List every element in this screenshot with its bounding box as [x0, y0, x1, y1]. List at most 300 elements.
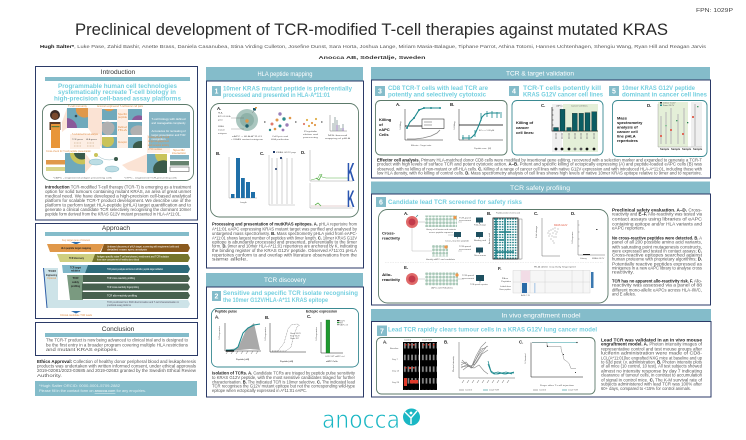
intro subheading: high-precision cell-based assay platforms — [54, 96, 182, 102]
panel: approach: Key target gene of interest — [62, 239, 90, 242]
contact bar: *Hugh Salter ORCID: 0000-0001-5709-2882 — [39, 384, 120, 388]
heading 5: 10mer KRAS G12V peptide — [622, 85, 696, 92]
chart: survival curve: % Survival — [524, 353, 527, 364]
figure box 1: A. — [217, 106, 221, 111]
middle tiles: Anocca's engineered T-cell/cancer cell pairs — [97, 105, 144, 108]
readout boxes: Specific — [173, 149, 186, 152]
step: TCR safety profiling: TCR — [72, 276, 78, 280]
figure box 2 — [212, 308, 358, 367]
chart: cell line pHLA repertoires: Sample — [660, 147, 670, 151]
lower right tile: and receptor activity — [148, 144, 170, 147]
intro subheading: systematically recreate T-cell biology in — [58, 89, 176, 96]
caption 3-5: observed, with no killing of non-mutant or off-HLA cells. C. Killing of a range of cancer cell lines with native G12V expression and with introduced HLA-A*11:01, including those with — [377, 166, 703, 171]
middle tiles: TCR genes — [72, 139, 84, 141]
caption 6: TCR has no apparent allo-reactivity risk. F. Allo- — [612, 278, 703, 283]
mouse imaging panels: Lead TCR — [422, 340, 432, 342]
chart: peptide lengths: Length — [240, 201, 247, 204]
contact bar: Please fill in the contact form on anocca.com for any enquiries. — [39, 389, 146, 393]
conclusion text: be the first entry in a broader program covering multiple HLA restrictions — [46, 342, 188, 348]
step: TCR engineering: preclinical assay platforms — [107, 303, 132, 307]
caption 6 — [612, 207, 703, 296]
badge 5: 5 — [612, 88, 616, 96]
affiliation: Anocca AB, Södertälje, Sweden — [318, 55, 426, 60]
row label: cell lines: — [516, 130, 534, 135]
middle tiles: HLA — [118, 129, 128, 132]
chart: peptide dose killing — [454, 109, 503, 150]
section: in vivo engraftment model: In vivo engraftment model — [502, 312, 580, 320]
poster ID: FPN: 1029P — [696, 8, 734, 14]
top tile — [67, 105, 88, 128]
row label — [617, 116, 643, 143]
section: TCR safety profiling — [371, 182, 710, 305]
section: HLA peptide mapping — [206, 67, 364, 268]
caption 6: reactivity and E–F. Allo-reactivity was tested via — [612, 212, 703, 216]
figure box 3 — [376, 100, 507, 155]
heading: introduction: Introduction — [101, 69, 136, 76]
step: TCR safety profiling — [67, 275, 190, 300]
ethics statement — [37, 359, 196, 378]
chart: 10mer selectivity: 9mer G12V — [290, 334, 300, 338]
heading 2: the 10mer G12V/HLA-A*11 KRAS epitope — [223, 297, 328, 304]
caption 1: Processing and presentation of mutKRAS epitopes. A. pHLA repertoire from — [212, 221, 358, 226]
step: peptide target mapping: Unbiased discovery of pHLA target, screening with engineered cells and — [107, 244, 179, 248]
chart: allo-reactivity heatmap: No — [502, 278, 510, 280]
row label: line pHLA — [617, 134, 636, 138]
badge 2: 2 — [215, 294, 219, 300]
heading 6: Candidate lead TCR screened for safety risks — [388, 199, 523, 206]
chart: photon intensity: Control — [465, 388, 473, 392]
caption 3-5: product with high levels of surface TCR and potent cytotoxic action. A–B. Potent and specific killing of ectopically expressing (A) and peptide-loaded eAPC cells (B) was — [377, 161, 702, 166]
figure box 6: F. — [498, 266, 501, 271]
allo-reactivity workflow — [406, 272, 488, 290]
section: TCR discovery — [206, 273, 364, 397]
figure box 2: Ectopic expression — [306, 310, 337, 314]
caption 7 — [601, 337, 703, 391]
intro text: Introduction TCR-modified T-cell therapy (TCR-T) is emerging as a treatment — [45, 184, 192, 190]
heading 5: dominant in cancer cell lines — [622, 92, 708, 98]
chart: 10mer selectivity: Peptide (nM) — [280, 360, 293, 363]
heading 3 — [388, 85, 489, 98]
section: TCR and target validation: TCR & target validation — [506, 70, 574, 78]
section: TCR safety profiling: TCR safety profiling — [510, 185, 570, 192]
intro text: peptide form derived from the KRAS G12V mutant presented in HLA-A*11:01. — [45, 211, 181, 216]
row label — [516, 120, 534, 135]
chart: minigene reactivity: Library — [580, 257, 588, 260]
icon: engineered cell: minigene — [218, 133, 228, 135]
chart: peptide pulse sensitivity — [219, 323, 261, 361]
chart: variant heatmap — [488, 212, 522, 259]
intro text: option for solid tumours containing mutant KRAS, an area of great unmet — [45, 189, 192, 194]
row label: spectrometry — [617, 120, 643, 125]
step: TCR safety profiling: safety — [72, 280, 79, 284]
caption 1 — [212, 221, 358, 262]
chart: allo-reactivity heatmap: Label-free — [500, 285, 512, 288]
heading 4 — [523, 85, 604, 98]
step: peptide target mapping: HLA peptide target mapping — [61, 246, 91, 250]
row label: of — [379, 122, 383, 127]
step: TCR engineering — [43, 268, 190, 308]
row label: Mass — [617, 116, 628, 120]
middle tiles: Defined — [118, 126, 128, 129]
caption 6: panel of all 200 possible amino acid variants, — [612, 240, 702, 244]
chart: ectopic expression: eAPC ctrl — [340, 324, 349, 326]
badge 7 — [377, 326, 387, 336]
caption 6: different mono-allelic eAPCs across HLA-I/II/C, — [612, 287, 702, 292]
chart: minigene reactivity: % Response — [572, 231, 574, 244]
heading 2: Sensitive and specific TCR isolate recognising — [223, 290, 358, 297]
section: TCR and target validation — [371, 67, 710, 178]
caption 6: eAPC reporters. — [612, 226, 645, 230]
icon: logo mark — [403, 408, 420, 426]
middle tiles — [72, 105, 144, 148]
chart: cross-reactive scatter: KRAS G12V — [554, 224, 568, 227]
chart: binding register 9mer — [310, 150, 355, 187]
caption 2 — [212, 370, 356, 393]
figure box 1: K — [347, 186, 355, 213]
step: peptide target mapping — [47, 244, 190, 252]
heading 1 — [223, 86, 353, 99]
chart: survival curve: Lead TCR — [568, 390, 578, 392]
allo-reactivity workflow: eAPCs with HLA alleles — [431, 286, 454, 290]
figure box 5: D. — [647, 103, 651, 108]
icon: peptides: processing — [303, 136, 319, 139]
chart: peptide dose killing: Peptide conc. (M) — [474, 147, 491, 150]
lower right tile: Cross-check T-cell — [148, 136, 169, 139]
caption 2: Isolation of TCRs. A. Candidate TCRs are triaged by peptide pulse sensitivity — [212, 370, 356, 375]
step: TCR engineering: TCR preclinical from SND discrimination and T-cell characterisation in — [107, 300, 179, 304]
middle tiles: Receptor — [118, 141, 127, 144]
ethics statement: Authority. — [37, 373, 62, 378]
step: TCR safety profiling: TCR cross-reactivity fingerprinting — [107, 285, 139, 289]
middle tiles: HLA genes — [86, 138, 98, 141]
logo: anocca: anocca — [322, 405, 400, 434]
chart: cross-reactive scatter: Fold change — [536, 225, 538, 238]
chart: cell line pHLA repertoires: Sample — [682, 147, 692, 151]
icon: engineered cell: eAPC + HLA-A*11:01 — [232, 135, 263, 138]
caption 6: minigenes in a new eAPC library to analyse cross — [612, 265, 702, 270]
cross-reactivity workflow: Identify eAPC and candidate — [426, 258, 456, 261]
ethics statement: Ethics Approval: Collection of healthy donor peripheral blood and leukapheresis — [37, 359, 196, 364]
conclusion text — [46, 338, 189, 352]
conclusion text: and mutant KRAS epitopes. — [46, 347, 118, 352]
caption 1: same allele. — [212, 256, 248, 262]
chart: ectopic expression: G12V — [340, 320, 346, 322]
heading: conclusion: Conclusion — [102, 326, 135, 333]
icon: patient — [50, 110, 60, 148]
figure box 6: C. — [534, 211, 538, 216]
step: TCR safety profiling: TCR allo-reactivity profiling — [107, 294, 137, 298]
heading 2 — [223, 290, 358, 304]
icon: peptides: elution and — [303, 133, 319, 136]
readout boxes: interaction — [172, 152, 187, 155]
imaging row labels: Day 28 — [392, 382, 400, 384]
icon: cell pellet: Cell lysis and — [272, 136, 289, 138]
row label: eAPC — [379, 127, 390, 132]
icon: MS spectrum — [325, 115, 351, 140]
caption 2: characterisation. B. The indicated TCR is 10mer selective. C. The indicated lead — [212, 379, 356, 384]
readout boxes — [170, 149, 189, 172]
step: TCR discovery: TCR discovery — [69, 256, 84, 260]
badge 4 — [509, 86, 519, 96]
step: TCR discovery — [57, 254, 190, 262]
icon: MS spectrum: MS-based — [328, 135, 348, 137]
platform diagram: *eTPC - engineered TCR-presenting cells — [124, 176, 178, 180]
row label: Killing — [379, 117, 392, 122]
chart: peptide dose killing: % Killing — [454, 121, 456, 130]
caption 1: A*11:01 eAPC expressing KRAS mutant target was purified and analysed by — [212, 226, 358, 231]
step: TCR engineering: Optional — [47, 277, 56, 280]
chart: cancer cell line killing: eAPCs — [556, 104, 564, 108]
platform diagram: Cross-check for T-cell peptide presentation — [46, 150, 92, 153]
callout: TCR biology text — [149, 112, 190, 148]
lower right tile — [122, 136, 170, 173]
panel: introduction — [36, 66, 198, 220]
row label: cancer cell — [617, 129, 638, 134]
icon: cell pellet — [269, 112, 291, 141]
conclusion text: The TCR-T product is now being advanced to clinical trial and is designed to — [46, 338, 189, 342]
figure box 2: B. — [265, 315, 269, 320]
allo-reactivity workflow: TCR-panel — [462, 275, 475, 277]
chart: cell line pHLA repertoires: 9mer G12V — [663, 104, 675, 107]
lower left tile — [46, 153, 92, 173]
chart: variant heatmap: Peptide position of amino acid — [496, 212, 521, 214]
caption 1: epitope is abundantly processed and presented, preferentially to the 9mer — [212, 239, 358, 244]
row label: cancer — [516, 125, 529, 130]
caption 7: Lead TCR was validated in an in vivo mouse — [601, 337, 703, 342]
caption 6: with saturating point mutagenesis constructs, — [612, 244, 702, 249]
intro text — [45, 184, 192, 216]
cell dishes — [89, 153, 119, 172]
cross-reactivity workflow: TCR-panel — [459, 246, 472, 248]
title: Preclinical development of TCR-modified T-cell therapies against mutated KRAS — [75, 21, 668, 39]
section: TCR discovery: TCR discovery — [264, 277, 307, 284]
figure box 3: B. — [450, 102, 454, 107]
cross-reactivity workflow — [406, 215, 487, 261]
badge 6: 6 — [379, 200, 383, 206]
imaging row labels: Day 14 — [392, 370, 400, 372]
chart: ectopic expression — [316, 320, 349, 363]
mouse imaging panels — [403, 338, 437, 390]
platform diagram: *eAPC - engineered antigen presenting cells — [53, 176, 113, 180]
icon: engineered cell: + KRAS mutant minigene — [231, 138, 264, 141]
ethics statement: products was undertaken with written informed consent, under ethical approvals — [37, 364, 196, 369]
figure box 7: C. — [519, 340, 523, 344]
step: TCR discovery: Antigen specific naive T cell enrichment, enrichment and TCR isolation — [97, 254, 169, 258]
figure box 1 — [210, 104, 358, 217]
intro text: platform to perform target HLA-peptide (pHLA) target quantification and to — [45, 202, 192, 207]
chart: peptide pulse sensitivity: % Responsive — [219, 325, 221, 340]
caption 6: and E alleles. — [612, 292, 636, 296]
caption 6: reactivity. — [612, 270, 634, 274]
caption 6: were expressed and tested in contact assays; C. — [612, 248, 702, 253]
row label: cross-reactivity: Cross- — [382, 230, 396, 236]
chart: 10mer selectivity: 10mer WT — [290, 337, 300, 340]
imaging row labels — [390, 348, 400, 384]
caption 7: engraftment model. A. Photon intensity images of — [601, 342, 703, 346]
section: in vivo engraftment model — [371, 309, 711, 397]
figure box 3: A. — [396, 102, 400, 107]
chart: killing dose response — [400, 107, 444, 147]
imaging row labels: Baseline — [390, 348, 399, 350]
chart: cancer cell line killing — [552, 104, 598, 152]
chart: survival curve — [524, 342, 583, 392]
chart: ectopic expression: WT — [340, 322, 344, 324]
step: TCR engineering: TCR — [48, 269, 57, 273]
chart: peptide lengths — [229, 157, 257, 204]
caption 6: Preclinical safety evaluation. A–D. Cross- — [612, 207, 703, 212]
figure box 6: B. — [487, 211, 491, 216]
badge 7: 7 — [380, 328, 384, 336]
chart: ectopic expression: eAPC Cells — [326, 360, 338, 363]
lower right tile: of TCR candidates — [148, 148, 163, 151]
figure box 5 — [612, 100, 707, 156]
callout: TCR biology text: recognition — [152, 137, 166, 141]
chart: survival curve: Days after T-cell injection — [540, 384, 575, 387]
cross-reactivity workflow: assessment — [459, 248, 471, 251]
row label: Cells — [379, 132, 389, 137]
figure box 4 — [512, 100, 603, 155]
chart: allo-reactivity heatmap: Peptides — [501, 280, 512, 283]
icon: engineered cell: KRAS — [218, 125, 224, 128]
badge 4: 4 — [512, 88, 516, 96]
middle tiles: Specific — [118, 113, 128, 116]
chart: cell line pHLA repertoires: Sample — [671, 147, 681, 151]
chart: allo-reactivity heatmap: HLA allele reactivity fingerprint — [534, 266, 577, 268]
row label: allo-reactivity — [382, 272, 401, 282]
top tile: T-cell immunity — [68, 105, 88, 108]
figure box 6: D. — [571, 211, 575, 216]
caption 7: to 63d post i.v. administration. B. Photon intensity plots — [601, 359, 702, 364]
arrow: into workflow — [71, 242, 81, 244]
caption 3-5: low HLA density, with no killing of control cells. D. Mass spectrometry analysis of cell lines shows high levels of native 10mer KRAS epitope relative to 9mer and to repertoire. — [377, 170, 702, 176]
intro subheading: Programmable human cell technologies — [58, 83, 178, 90]
caption 6: contact assays using libraries of eAPC — [612, 216, 702, 221]
intro text: medical need. We have developed a high-precision cell-based analytical — [45, 194, 191, 198]
caption 7: LCL(A*11:01)luc engrafted NXG mice at baseline and up — [601, 355, 703, 360]
chart: cell line pHLA repertoires — [658, 102, 703, 151]
callout: TCR biology text: and manageable complexity — [152, 121, 186, 125]
chart: peptide dose killing: EC₅₀ = 1.09 pM — [479, 130, 494, 132]
cross-reactivity workflow: Binding and — [474, 240, 487, 242]
authors: Hugh Salter* , Luke Pase, Zahid Bashir, Anette Brass, Daniela Casanubea, Stina Virding Culleton, Josefine Dunst, Sara Horta, Joshua Lange, Miriam Masia-Balague, Tiphane Parrot, Athina Totomi, Hannes Uchtenhagen, Shengiu Wang, Ryan Hill and Reagan Jarvis — [40, 44, 706, 49]
lower right tile: target engagement — [148, 140, 169, 143]
chart: allo-reactivity heatmap: A B C D — [521, 294, 530, 297]
step: peptide target mapping: detailed mass spec analysis — [107, 248, 148, 252]
cross-reactivity workflow: Library of all amino acid variants — [426, 228, 457, 231]
caption 2: TCR recognises the G12V mutant epitope but not the corresponding wild-type — [212, 384, 356, 388]
caption 7: representative control and test mouse groups after — [601, 346, 703, 351]
row label: Killing of — [516, 120, 534, 125]
chart: peptide pulse sensitivity: Peptide [nM] — [236, 358, 249, 361]
caption 3-5: Effector cell analysis. Primary HLA-matched donor CD8 cells were modified by insertional gene editing, recovered with a selection marker and expanded to generate a TCR-T — [377, 157, 703, 162]
heading 4: KRAS G12V cancer cell lines — [523, 92, 604, 98]
chart: cell line pHLA repertoires: 10mer G12V — [663, 102, 676, 104]
chart: variant heatmap: Amino acid — [488, 232, 491, 244]
row label: repertoires — [617, 138, 639, 143]
chart: ectopic expression: % Responsive — [316, 326, 318, 341]
caption 6: containing epitope and/or HLA variants and — [612, 221, 703, 226]
badge 3 — [375, 86, 385, 96]
cross-reactivity workflow: Cross-reactive peptide — [445, 240, 470, 242]
cross-reactivity workflow: across peptide sequence — [429, 231, 454, 234]
heading 4: TCR-T cells potently kill — [523, 85, 601, 92]
caption 1: A*11:01 shows largest number of peptides with 9mer length. C. 10mer KRAS G12V — [212, 235, 357, 240]
step: TCR safety profiling: TCR cross-reactivity profiling — [107, 276, 135, 280]
badge 1: 1 — [215, 88, 219, 96]
icon: engineered cell — [218, 107, 264, 141]
cross-reactivity workflow: Fold-change — [474, 224, 487, 226]
heading 1: processed and presented in HLA-A*11:01 — [223, 92, 330, 99]
intro text: generate a clinical candidate TCR selectively recognising the dominant 10mer — [45, 207, 192, 212]
chart: survival curve: Control — [539, 388, 547, 392]
step: TCR target validation: validation — [71, 268, 80, 272]
badge 2 — [212, 291, 221, 301]
allo-reactivity workflow: assessment — [462, 277, 474, 280]
chart: 10mer selectivity: 10mer G12V — [290, 332, 301, 335]
arrow: out of workflow — [71, 311, 81, 314]
icon: peptides — [303, 118, 319, 139]
chart: killing dose response: % Killing — [400, 121, 402, 130]
caption 7: almost no intensity response by day 7 indicating — [601, 368, 703, 373]
row label: allo-reactivity: reactivity — [382, 277, 401, 282]
middle tiles: peptide — [118, 116, 128, 119]
cross-reactivity workflow: Screen — [474, 254, 487, 257]
caption 7: clearance of tumour cells, in contrast to accumulation — [601, 372, 703, 378]
figure box 7: A. — [383, 340, 387, 344]
caption 1: form. D. 9mer and 10mer HLA-A*11:01 repertoires are anchored by K, indicating — [212, 244, 358, 248]
section: HLA peptide mapping: HLA peptide mapping — [258, 71, 313, 78]
caption 6: Cross-reactive epitopes searched against — [612, 252, 703, 258]
figure box 2: C. — [307, 314, 311, 319]
caption 1: untargeted mass spectrometry. B. Mass spectrometry pHLA yield from eAPC- — [212, 231, 358, 236]
figure box 2: A. — [215, 314, 219, 320]
chart: peptide scatter — [269, 151, 297, 205]
row label: analysis of — [617, 124, 638, 130]
figure box 4: C. — [541, 103, 545, 108]
caption 7: 60+ days, compared to <15% for control animals. — [601, 386, 691, 391]
chart: allo-reactivity heatmap: 10mer peptides — [499, 288, 512, 291]
cross-reactivity workflow: assessment — [459, 219, 471, 222]
caption 1: repertoires conform to and overlap with literature observations from the — [212, 252, 358, 257]
intro text: platform for scalable TCR-T product development. We describe use of the — [45, 198, 192, 203]
chart: peptide scatter: KRAS G12V pep — [276, 151, 297, 154]
caption 1: the binding register of the KRAS G12V peptide. Observed A*11:01 pHLA — [212, 248, 357, 253]
row label — [379, 117, 392, 137]
chart: minigene reactivity: KRAS G12V — [592, 257, 605, 260]
allo-reactivity workflow: TCR-panel reporter — [470, 283, 488, 286]
mouse imaging panels: Control — [404, 338, 412, 342]
caption 7: subjects administered with lead TCR was 100% after — [601, 382, 703, 386]
heading: approach: Approach — [102, 225, 130, 232]
figure box 1: K — [347, 157, 355, 187]
figure box 6: A. — [404, 211, 408, 216]
figure box 6: E. — [404, 265, 408, 270]
row label: cross-reactivity — [382, 230, 401, 240]
figure box 2: Peptide pulse — [215, 310, 237, 314]
chart: ectopic expression: G12V WT eAPC ctrl — [325, 355, 345, 358]
chart: killing dose response: Effector : Target ratio — [411, 144, 432, 147]
badge 6 — [376, 197, 386, 207]
badge 5 — [609, 86, 619, 96]
step: TCR target validation: TCR target — [70, 266, 81, 270]
contact bar — [35, 381, 197, 396]
figure box 1: C. — [260, 151, 264, 156]
chart: cancer cell line killing: Cancer Cell lines — [571, 104, 588, 108]
badge 1 — [212, 86, 221, 96]
ethics statement: 2019-02081/2023-03685 and 2019-02683 granted by the Swedish Ethical Review — [37, 368, 196, 373]
icon: engineered cell: mutant — [218, 128, 225, 132]
icon: engineered cell: HLA- — [218, 112, 223, 114]
